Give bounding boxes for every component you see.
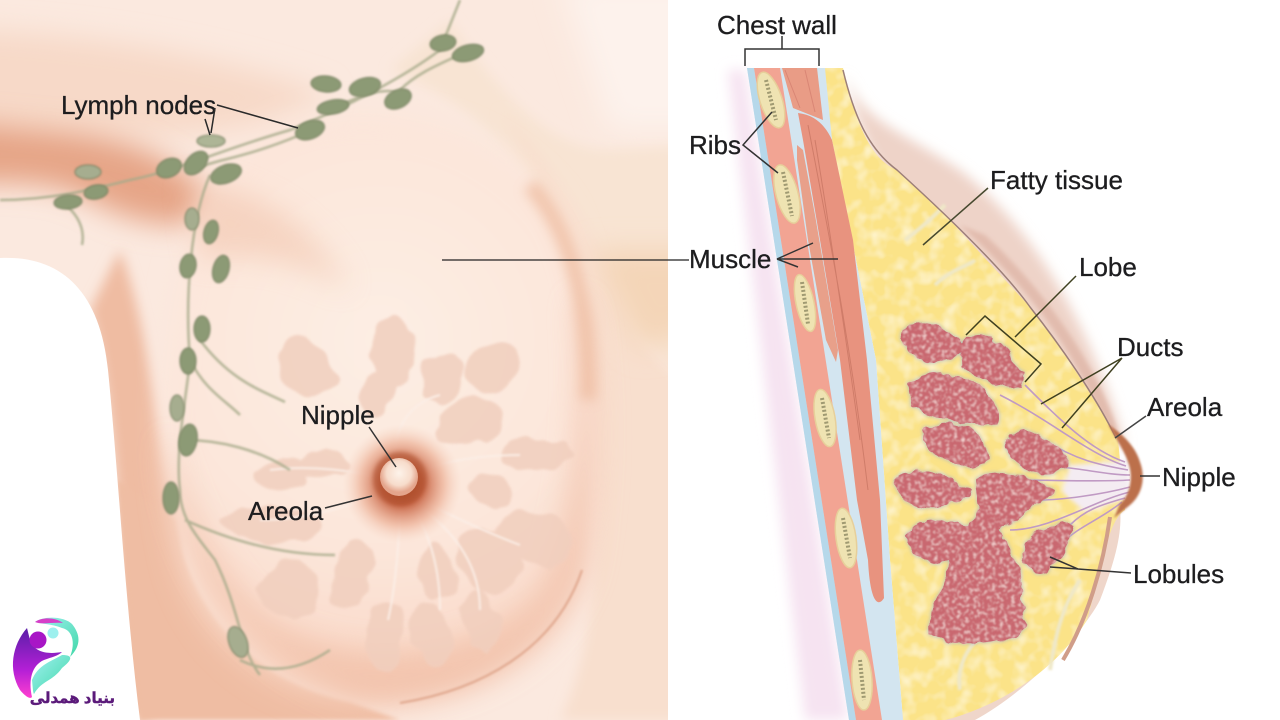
logo (0, 605, 125, 720)
icon: areola (348, 429, 456, 538)
heading: Areola label (248, 496, 372, 526)
lymph nodes (53, 33, 486, 660)
label: Ribs (689, 112, 778, 173)
skin background (0, 0, 668, 720)
label: Ducts (1041, 332, 1183, 428)
heading: Lymph nodes label: Lymph nodes (61, 90, 216, 120)
panel: cross-section of the breast (442, 10, 1236, 720)
logo wordmark: بنیاد همدلی (30, 690, 115, 707)
label: Lobules: Lobules (1133, 559, 1224, 589)
outer skin line (843, 70, 1116, 438)
label: Ducts: Ducts (1117, 332, 1183, 362)
heading: Nipple label: Nipple (301, 400, 375, 430)
lymph vessels (0, 0, 470, 675)
lobules (894, 323, 1075, 643)
icon: nipple cross-section (1108, 424, 1143, 518)
label: Areola (1115, 392, 1223, 438)
skin outer band (845, 72, 1125, 450)
label: Fatty tissue (923, 165, 1123, 245)
label: Lobules (1050, 557, 1224, 589)
lobes of the front view (222, 315, 581, 672)
arm white cutout (0, 258, 140, 720)
breast form (152, 200, 566, 711)
label: Chest wall: Chest wall (717, 10, 837, 40)
label: Areola: Areola (1147, 392, 1223, 422)
fatty tissue (823, 68, 1125, 720)
chest side skin haze (728, 70, 848, 720)
heading: Areola label: Areola (248, 496, 324, 526)
heading: Lymph nodes label (61, 90, 298, 135)
label: Fatty tissue: Fatty tissue (990, 165, 1123, 195)
label: Muscle (442, 243, 838, 274)
icon: ribs (752, 69, 874, 711)
icon: logo figure (13, 618, 79, 698)
label: Chest wall (717, 10, 837, 66)
label: Lobe: Lobe (1079, 252, 1137, 282)
heading: Nipple label (301, 400, 396, 467)
label: Nipple: Nipple (1162, 462, 1236, 492)
label: Lobe (966, 252, 1137, 382)
chest wall layers (747, 68, 903, 720)
panel: front view of the breast (0, 0, 720, 720)
label: Muscle: Muscle (689, 244, 771, 274)
ducts (1062, 460, 1130, 512)
label: Ribs: Ribs (689, 130, 741, 160)
